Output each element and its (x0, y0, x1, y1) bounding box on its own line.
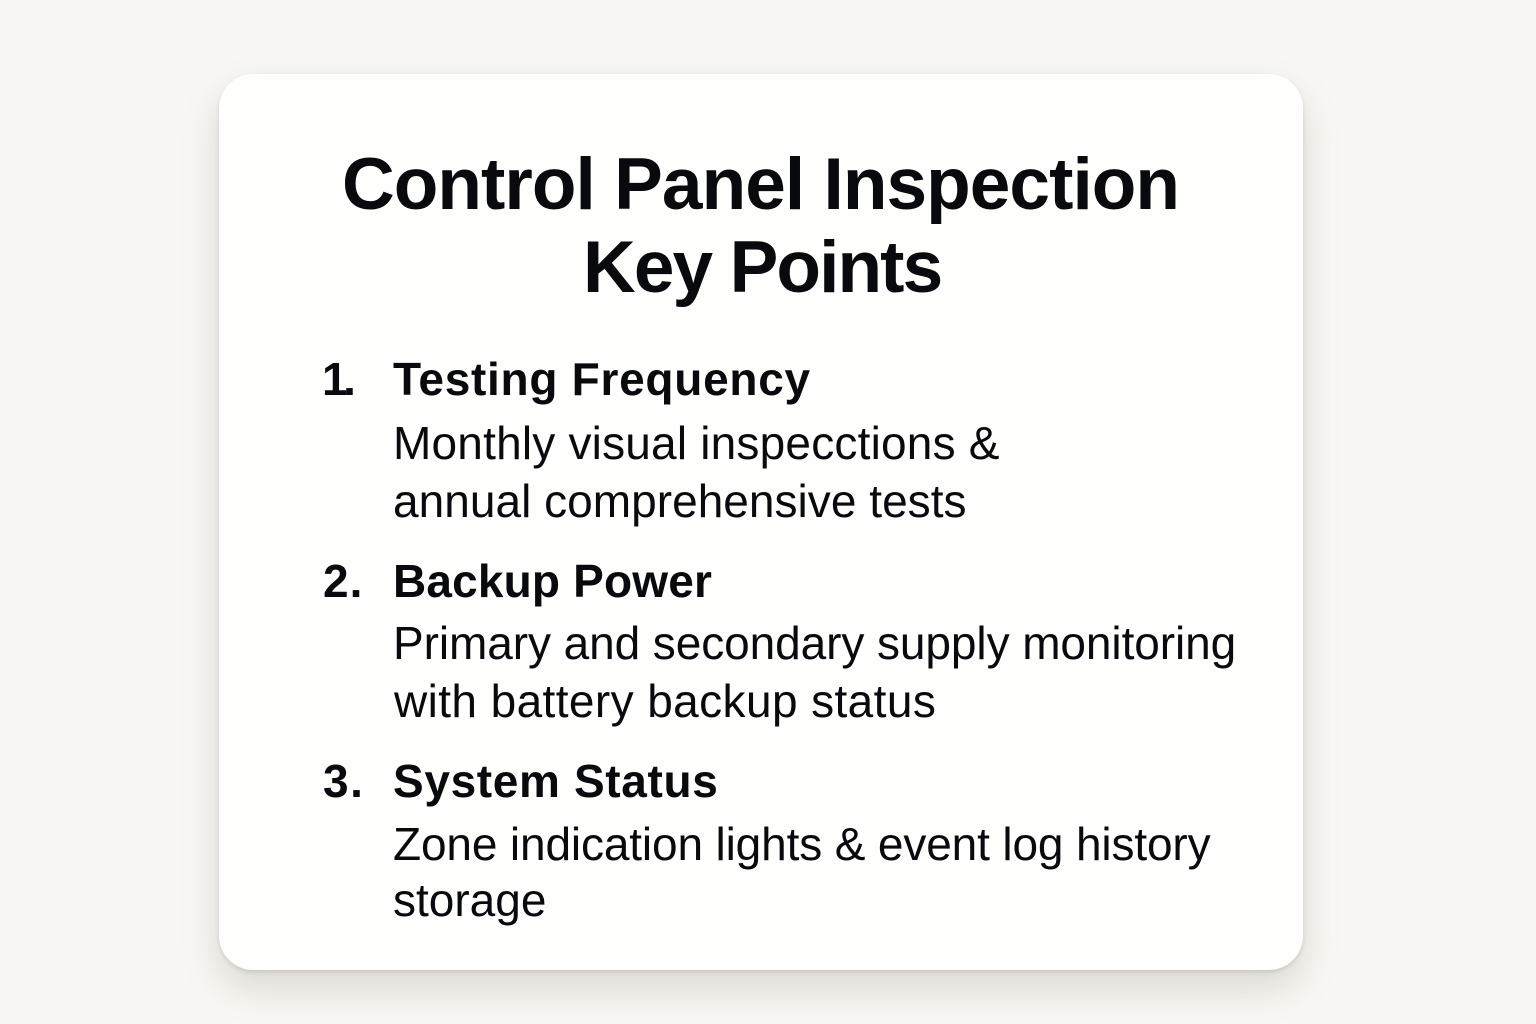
description 1: annual comprehensive tests (393, 475, 967, 527)
description 2 (393, 617, 1236, 727)
description 3: Zone indication lights & event log history (393, 818, 1210, 870)
description 2: Primary and secondary supply monitoring (393, 617, 1236, 669)
description 2: with battery backup status (394, 675, 936, 727)
heading 3: System Status (393, 755, 718, 807)
item 3: system status (323, 755, 1210, 926)
number 3: 3. (323, 755, 364, 807)
panel: card (219, 74, 1303, 970)
heading 1: Testing Frequency (393, 353, 811, 405)
title (342, 144, 1179, 308)
description 1 (393, 417, 1000, 527)
title: Control Panel Inspection (342, 144, 1179, 225)
item 2: backup power (323, 555, 1236, 727)
item 1: testing frequency (322, 353, 1000, 527)
description 3 (393, 818, 1210, 926)
number 1: 1. (322, 353, 351, 405)
description 1: Monthly visual inspecctions & (393, 417, 1000, 469)
number 2: 2. (323, 555, 363, 607)
title: Key Points (583, 227, 941, 308)
description 3: storage (393, 874, 546, 926)
heading 2: Backup Power (393, 555, 712, 607)
